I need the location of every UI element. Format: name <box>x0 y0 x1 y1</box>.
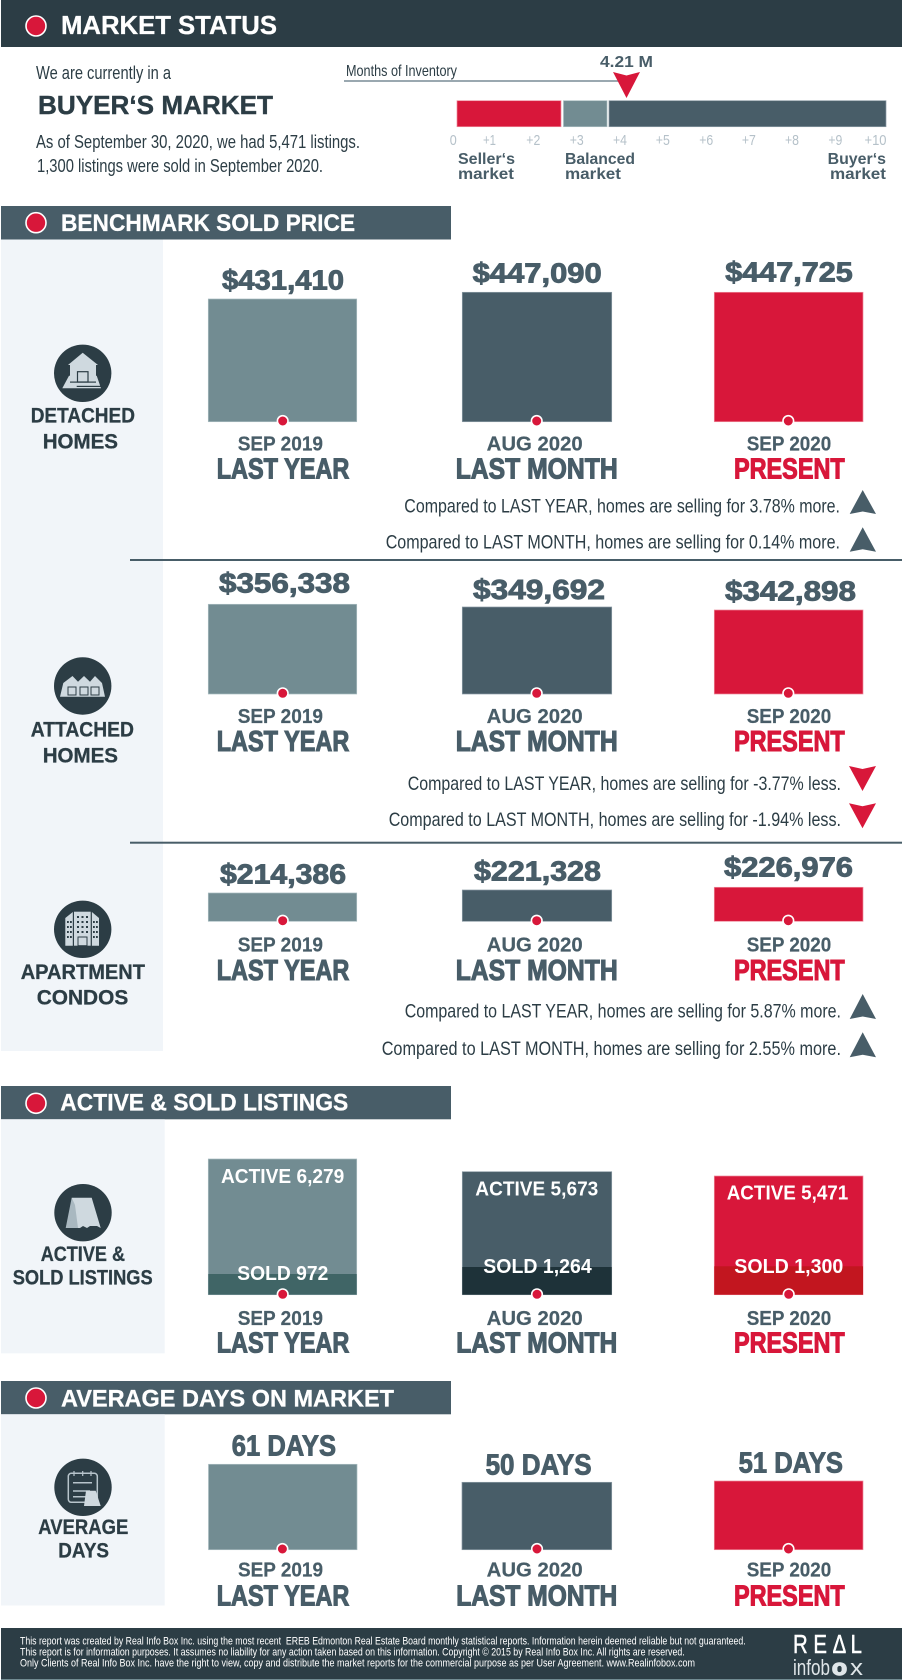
bar: seller's market range <box>457 101 561 127</box>
bar: days present: PRESENT <box>734 1580 845 1612</box>
heading: average days on market <box>1 1381 451 1414</box>
bar: listings present: SEP 2020 <box>747 1308 831 1330</box>
label: active and sold listings <box>13 1243 153 1290</box>
label: active and sold listings: ACTIVE & <box>41 1243 125 1266</box>
label: average days <box>38 1516 128 1563</box>
panel: active and sold listings <box>1 1086 863 1360</box>
bar: detached present <box>714 257 863 486</box>
row: detached homes <box>31 257 876 554</box>
label: seller's market: Seller‘s <box>458 151 515 168</box>
heading: benchmark sold price <box>1 206 451 240</box>
label: buyer's market <box>828 151 887 183</box>
bar: listings last year: SEP 2019 <box>238 1308 323 1330</box>
bar: attached present: PRESENT <box>734 726 845 758</box>
scale ticks: +4 <box>613 132 627 149</box>
label: attached homes: ATTACHED <box>31 719 134 742</box>
label: seller's market: market <box>458 166 515 183</box>
bar: days last month: AUG 2020 <box>487 1560 583 1582</box>
bar: days present <box>714 1448 863 1612</box>
bar: detached last month: LAST MONTH <box>456 454 618 486</box>
footer <box>1 1628 902 1680</box>
text: currently in a buyer's market <box>36 63 360 176</box>
bar: apartment last month <box>456 856 618 987</box>
row: apartment condos <box>21 852 876 1060</box>
label: detached homes: HOMES <box>43 430 118 453</box>
heading: benchmark sold price: BENCHMARK SOLD PRICE <box>61 210 355 237</box>
disclaimer text: Only Clients of Real Info Box Inc. have the right to view, copy and distribute the market reports for the commercial purpose as per User Agreement. www.Realinfobox.com <box>20 1658 695 1670</box>
scale ticks: +7 <box>742 132 756 149</box>
label: balanced market <box>565 151 635 183</box>
disclaimer text: This report is for information purposes. It assumes no liability for any action taken based on this information. Copyright © 2015 by Real Info Box Inc. All rights are reserved. <box>20 1647 685 1659</box>
label: balanced market: Balanced <box>565 151 635 168</box>
icon: detached house <box>54 345 111 402</box>
scale ticks: +2 <box>526 132 540 149</box>
label: balanced market: market <box>565 166 622 183</box>
bar: attached last month: AUG 2020 <box>487 706 583 728</box>
bar: attached present: SEP 2020 <box>747 706 831 728</box>
divider line <box>130 842 902 844</box>
sidebar background <box>1 240 163 1051</box>
bar: apartment present <box>714 852 863 987</box>
bar: apartment last month: AUG 2020 <box>487 935 583 957</box>
bar: apartment last month: LAST MONTH <box>456 955 618 987</box>
icon: a-frame sign <box>54 1184 112 1241</box>
logo: real infobox: R E Δ L <box>793 1629 862 1659</box>
logo: real infobox: infob <box>793 1655 830 1680</box>
label: detached homes <box>31 405 135 453</box>
bar: days present: SEP 2020 <box>747 1560 831 1582</box>
label: apartment condos: APARTMENT <box>21 961 145 984</box>
disclaimer text <box>20 1636 746 1670</box>
scale ticks: +5 <box>656 132 670 149</box>
bar: days last month: 50 DAYS <box>486 1450 592 1482</box>
icon: apartment building <box>54 901 111 958</box>
heading: market status: MARKET STATUS <box>61 10 277 40</box>
bar: days last month <box>456 1450 617 1612</box>
bar: buyer's market range <box>609 101 886 127</box>
label: apartment condos: CONDOS <box>37 986 128 1009</box>
bar: detached last month: AUG 2020 <box>487 434 583 456</box>
text: currently in a buyer's market: As of September 30, 2020, we had 5,471 listings. <box>36 132 360 152</box>
bar: apartment present: SEP 2020 <box>747 935 831 957</box>
label: buyer's market: Buyer‘s <box>828 151 886 168</box>
logo: real infobox: x <box>850 1655 863 1680</box>
text: currently in a buyer's market: We are currently in a <box>36 63 172 83</box>
chart: months of inventory scale: 4.21 M <box>600 54 653 71</box>
scale ticks: +3 <box>570 132 584 149</box>
sidebar background <box>1 1119 165 1353</box>
scale ticks: 0 <box>450 132 457 149</box>
bar: listings last year: SOLD 972 <box>237 1263 328 1285</box>
scale ticks: +6 <box>699 132 713 149</box>
bar: detached present: PRESENT <box>734 454 845 486</box>
bar: listings last year <box>208 1159 357 1360</box>
bar: attached last month: $349,692 <box>473 574 605 605</box>
bar: days last year: 61 DAYS <box>232 1431 336 1463</box>
bar: listings present <box>714 1176 863 1360</box>
bar: attached present <box>714 576 863 758</box>
text: currently in a buyer's market: BUYER‘S MARKET <box>38 90 273 120</box>
bar: attached last month: LAST MONTH <box>456 726 618 758</box>
bar: detached last year <box>208 264 357 486</box>
bar: detached present: $447,725 <box>725 257 853 288</box>
panel: benchmark sold price <box>1 206 902 1060</box>
divider line <box>130 559 902 561</box>
scale ticks <box>450 132 886 149</box>
panel: market status <box>1 0 902 183</box>
bar: detached last month <box>456 257 618 486</box>
scale ticks: +9 <box>828 132 842 149</box>
bar: apartment last year <box>208 858 357 987</box>
bar: days last year <box>208 1431 357 1612</box>
label: attached homes: HOMES <box>43 744 118 767</box>
icon: calendar with sign <box>54 1459 112 1516</box>
bar: days present: 51 DAYS <box>739 1448 843 1480</box>
bar: apartment present: PRESENT <box>734 955 845 987</box>
bar: detached last year: $431,410 <box>222 264 344 295</box>
bar: listings last month: SOLD 1,264 <box>483 1256 593 1278</box>
heading: market status <box>1 0 902 47</box>
chart: months of inventory scale <box>344 54 887 183</box>
bar: detached present: SEP 2020 <box>747 434 831 456</box>
icon: attached homes <box>54 657 111 715</box>
bar: listings last year: LAST YEAR <box>217 1328 349 1360</box>
bar: attached last month <box>456 574 618 758</box>
bar: apartment last year: $214,386 <box>220 858 346 889</box>
scale ticks: +1 <box>483 132 496 149</box>
heading: active and sold listings: ACTIVE & SOLD LISTINGS <box>60 1090 348 1117</box>
bar: listings present: ACTIVE 5,471 <box>727 1183 848 1205</box>
label: apartment condos <box>21 961 145 1009</box>
bar: detached last year: SEP 2019 <box>238 434 323 456</box>
scale ticks: +10 <box>864 132 886 149</box>
bar: listings last year: ACTIVE 6,279 <box>221 1166 344 1188</box>
heading: average days on market: AVERAGE DAYS ON MARKET <box>61 1386 394 1412</box>
label: average days: AVERAGE <box>38 1516 128 1539</box>
row: attached homes <box>31 567 876 831</box>
bar: attached last year: LAST YEAR <box>217 726 349 758</box>
bar: listings last month <box>456 1172 617 1360</box>
bar: days last year: SEP 2019 <box>238 1560 323 1582</box>
label: average days: DAYS <box>58 1540 109 1563</box>
panel: average days on market <box>1 1381 863 1612</box>
sidebar background <box>1 1414 165 1606</box>
label: active and sold listings: SOLD LISTINGS <box>13 1267 153 1290</box>
bar: listings present: PRESENT <box>734 1328 845 1360</box>
bar: apartment present: $226,976 <box>724 852 853 883</box>
bar: apartment last year: SEP 2019 <box>238 935 323 957</box>
logo: real infobox: o <box>832 1655 847 1680</box>
logo: real infobox <box>793 1629 863 1680</box>
bar: days last month: LAST MONTH <box>456 1580 617 1612</box>
bar: listings present: SOLD 1,300 <box>734 1256 843 1278</box>
label: seller's market <box>458 151 515 183</box>
arrow: current inventory marker <box>613 72 640 98</box>
bar: attached present: $342,898 <box>725 576 856 607</box>
scale ticks: +8 <box>785 132 799 149</box>
bar: attached last year: SEP 2019 <box>238 706 323 728</box>
text: currently in a buyer's market: 1,300 listings were sold in September 2020. <box>37 156 323 176</box>
bar: apartment last month: $221,328 <box>474 856 601 887</box>
bar: attached last year <box>208 567 357 758</box>
bar: apartment last year: LAST YEAR <box>217 955 349 987</box>
bar: detached last month: $447,090 <box>473 257 602 288</box>
heading: active and sold listings <box>1 1086 451 1119</box>
bar: listings last month: LAST MONTH <box>456 1328 617 1360</box>
chart: months of inventory scale: Months of Inventory <box>346 63 457 80</box>
disclaimer text: This report was created by Real Info Box Inc. using the most recent EREB Edmonton Real Estate Board monthly statistical reports. Information herein deemed reliable but not guaranteed. <box>20 1636 746 1648</box>
bar: balanced market range <box>564 101 607 127</box>
bar: detached last year: LAST YEAR <box>217 454 349 486</box>
label: attached homes <box>31 719 134 767</box>
bar: listings last month: ACTIVE 5,673 <box>475 1179 598 1201</box>
bar: days last year: LAST YEAR <box>217 1580 349 1612</box>
label: buyer's market: market <box>830 166 887 183</box>
bar: attached last year: $356,338 <box>219 567 350 598</box>
bar: listings last month: AUG 2020 <box>487 1308 583 1330</box>
label: detached homes: DETACHED <box>31 405 135 428</box>
